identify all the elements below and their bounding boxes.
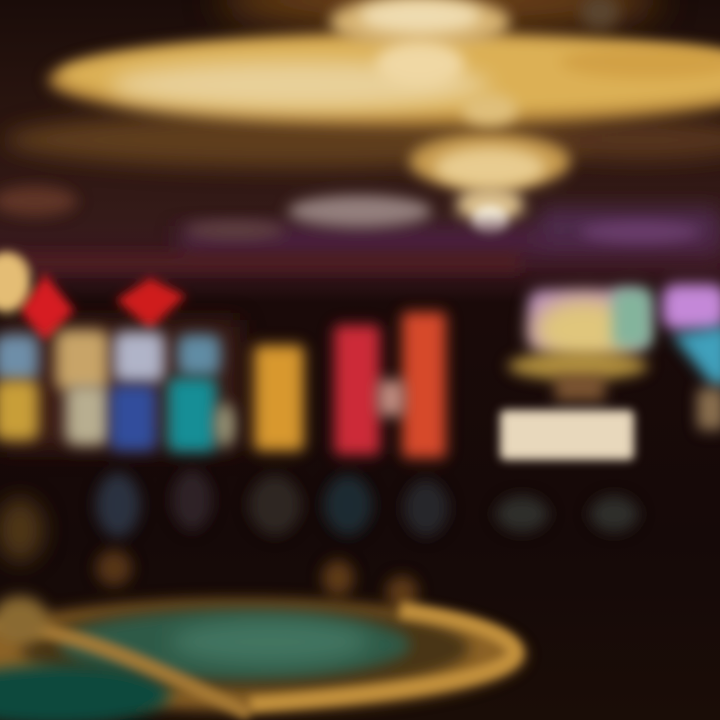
slot machines: orange and red group [254,312,446,458]
icon: lower chandelier [410,94,570,234]
icon: upper chandelier [330,0,510,86]
slot machine lower panels [96,470,638,537]
stools [0,498,418,608]
gaming table [0,596,525,720]
wall band with signage [0,186,720,272]
slot machines: left colourful group [0,252,240,452]
slot machines: right pastel group [500,284,720,460]
ceiling [5,0,720,168]
